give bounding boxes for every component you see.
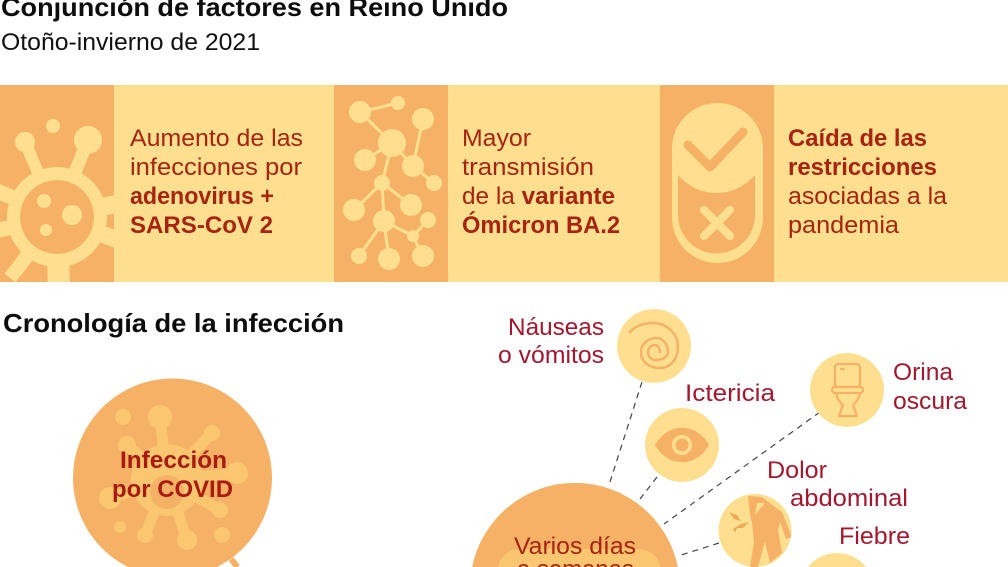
panel: restrictions factor [660,85,948,282]
text: restrictions: asociadas a la [788,183,948,210]
symptom: nausea [498,309,691,383]
text: omicron: Ómicron BA.2 [462,211,620,239]
text: adenovirus: Aumento de las [130,125,303,152]
label: dark urine: oscura [893,388,968,415]
symptom: abdominal pain [718,457,908,567]
label: abdominal pain: Dolor [767,457,827,484]
label: nausea [498,314,604,369]
dashed connectors [609,382,820,556]
text: omicron: transmisión [462,154,594,181]
icon: faded virus [99,405,248,550]
text: restrictions: Caída de las [788,125,927,152]
subtitle: Otoño-invierno de 2021 [1,29,260,56]
text: omicron: Mayor [462,125,531,152]
label: jaundice: Ictericia [685,380,776,407]
panel: infection circle [73,379,272,567]
icon: toilet [832,364,863,416]
text: infection: por COVID [112,476,233,503]
text: infection [112,447,233,503]
label: nausea: Náuseas [508,314,604,341]
panel: symptoms onset circle [472,483,678,567]
symptom: fever [808,523,910,567]
label: abdominal pain [767,457,908,512]
symptom: jaundice [645,380,776,482]
icon: eye [655,428,709,462]
text: restrictions: restricciones [788,154,937,181]
panel: factors band [0,85,1008,290]
text: infection: Infección [120,447,227,474]
icon: virus [0,119,120,290]
symptom: dark urine [810,353,968,427]
heading: timeline: Cronología de la infección [3,308,344,338]
connector line from infection circle [231,559,238,567]
icon: person in pain [729,496,792,567]
label: fever: Fiebre [839,523,910,550]
text: adenovirus: SARS-CoV 2 [130,212,273,239]
label: nausea: o vómitos [498,342,604,369]
panel: adenovirus factor [0,85,303,290]
label: abdominal pain: abdominal [790,485,908,512]
text: adenovirus: adenovirus + [130,183,274,210]
text: several days to weeks: Varios días [514,533,636,560]
text: omicron: de la variante [462,183,615,210]
text: restrictions: pandemia [788,212,900,239]
text: adenovirus [130,125,303,239]
text: omicron [462,125,620,239]
label: dark urine [893,359,968,415]
icon: spiral [630,323,678,368]
label: dark urine: Orina [893,359,954,386]
panel: omicron factor [334,85,620,282]
text: restrictions [788,125,948,239]
icon: check and cross pill [672,103,763,263]
icon: molecule network [343,96,442,270]
text: adenovirus: infecciones por [130,154,302,181]
